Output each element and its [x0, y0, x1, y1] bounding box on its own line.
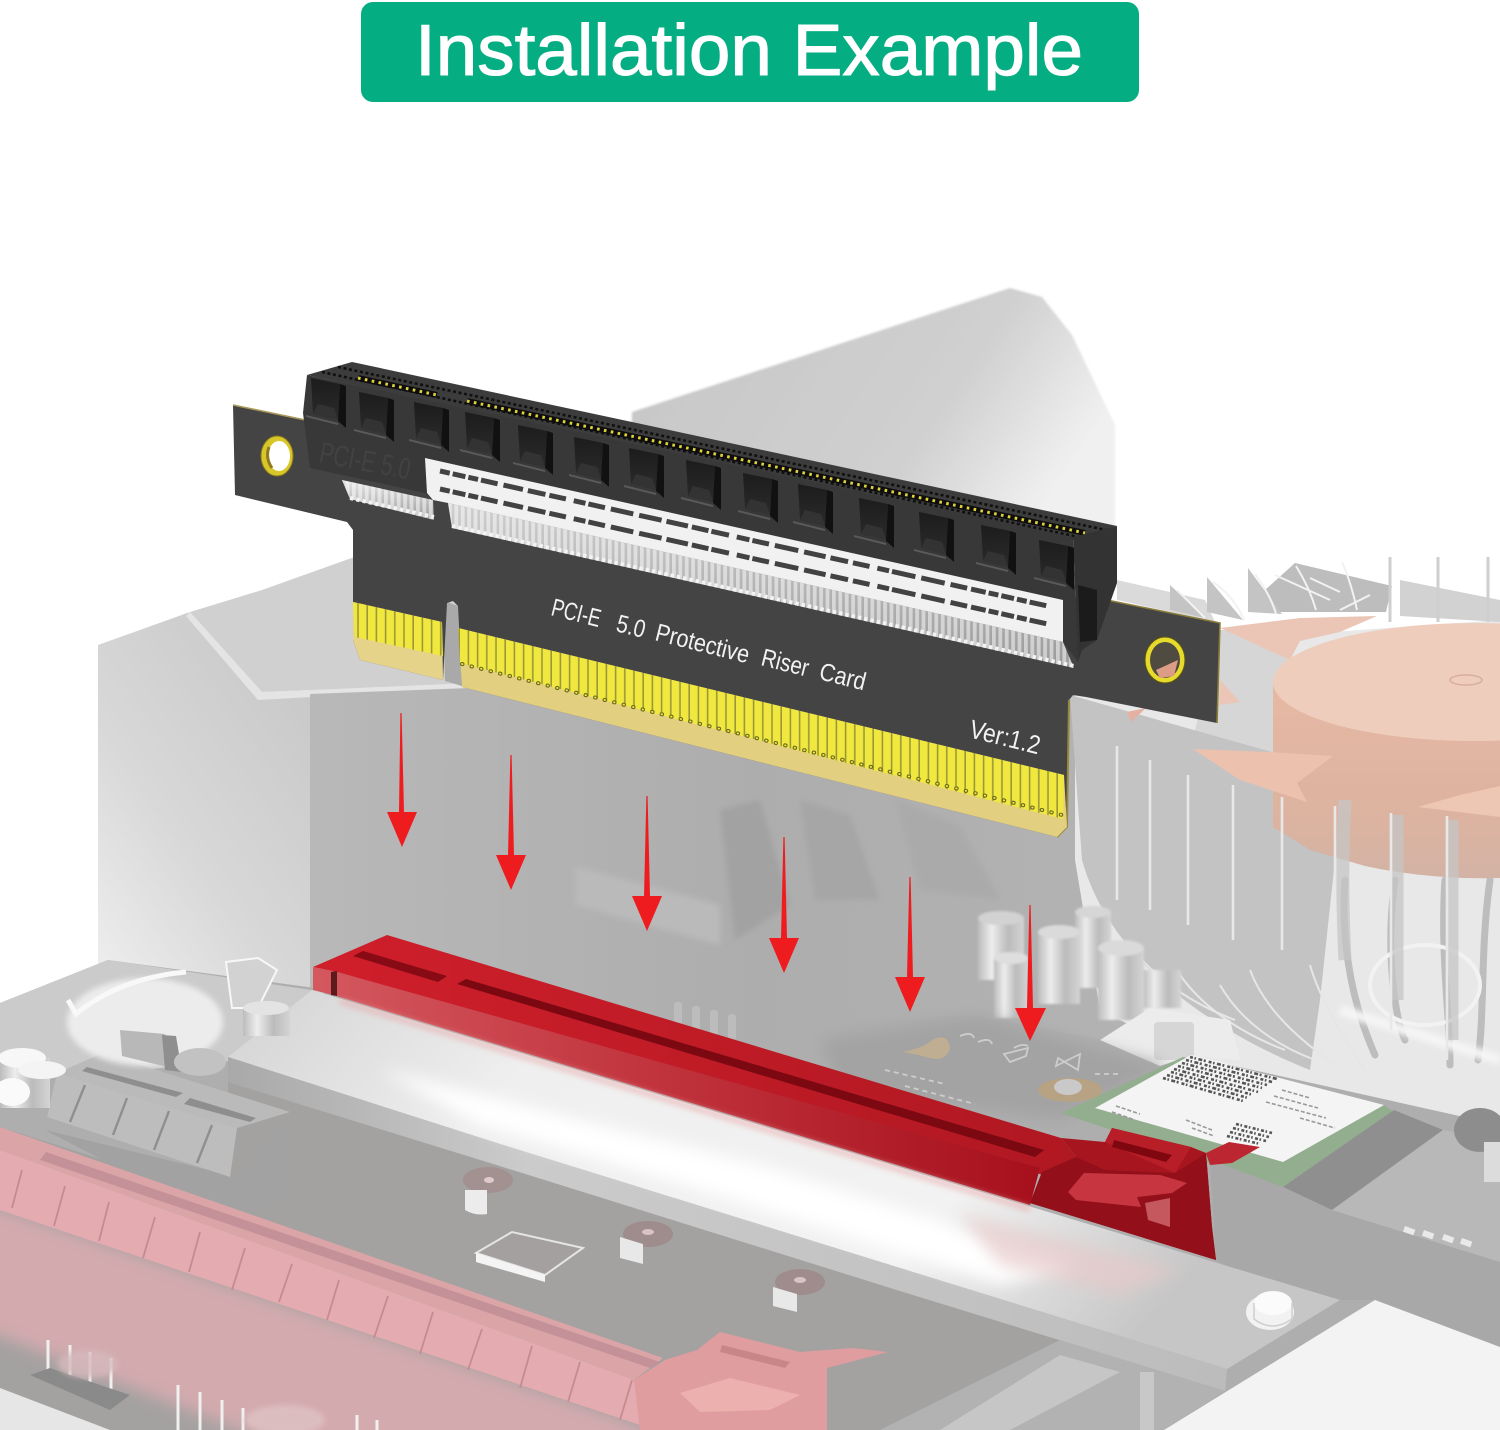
wall shading blocks: [575, 800, 1000, 945]
m.2 edge connector: [1283, 1110, 1443, 1210]
bright block behind wifi: [1100, 1008, 1240, 1066]
right side fins: [1344, 880, 1490, 1065]
fin posts: [1390, 557, 1488, 622]
lower board details: [463, 1167, 1500, 1430]
latch upper box: [1105, 1128, 1191, 1173]
pin header behind slot: [674, 1002, 736, 1040]
top fins: [1117, 563, 1500, 622]
lower board: [0, 1082, 1225, 1430]
dark knob and white chip: [1454, 1108, 1500, 1182]
fan hub top: [1273, 623, 1500, 741]
heatsink light backing: [1075, 620, 1500, 1135]
red insertion arrows: [387, 713, 1046, 1041]
screw post left: [463, 1167, 513, 1214]
module label: [1095, 1055, 1384, 1162]
curved fin arcs: [1130, 945, 1365, 1070]
label fine print: [1112, 1090, 1335, 1136]
fan small blade fragment: [1219, 680, 1240, 705]
chassis and wall backdrop: [98, 288, 1200, 1060]
left mounting hole: [261, 436, 293, 476]
lower slot latch: [634, 1332, 888, 1430]
crystal chip: [476, 1232, 583, 1282]
fan hub side: [1273, 680, 1500, 878]
title banner: [361, 2, 1139, 102]
cooling fan: [1117, 616, 1500, 1060]
motherboard surface: [0, 960, 1500, 1430]
white block bottom right: [1164, 1300, 1500, 1430]
tab edge highlights: [233, 405, 1220, 837]
lower slot tooth dividers: [12, 1170, 632, 1420]
card marking: [549, 594, 869, 696]
fan blade right: [1418, 786, 1500, 817]
curved fin body: [1070, 695, 1335, 1070]
version marking: Ver:1.2: [967, 714, 1044, 760]
cooler heatsink: [1070, 557, 1500, 1135]
gold finger tan base right: [458, 628, 1067, 837]
card marking: Riser: [759, 644, 812, 682]
bottom left pin headers: [0, 1340, 377, 1430]
latch arrow tip: [1206, 1142, 1260, 1165]
lighter post and floor: [880, 1340, 1225, 1430]
pink fragment under tab: [1127, 708, 1146, 722]
left chassis face: [98, 612, 316, 1010]
gold finger tan base left: [353, 602, 443, 680]
fan blade top: [1220, 616, 1377, 660]
fin lines over fan: [1117, 746, 1452, 1060]
arrow 1: [387, 713, 417, 847]
arrow 3: [632, 796, 662, 931]
slot top surface: [313, 935, 1076, 1175]
card marking: PCI-E: [549, 594, 604, 633]
card notch back: [443, 602, 462, 686]
white board strip: [0, 990, 1340, 1430]
banner title: Installation Example: [415, 11, 1083, 91]
strip screw post: [1246, 1291, 1294, 1330]
connector teeth: [306, 378, 1074, 590]
white shield plate: [425, 458, 1063, 642]
screw post mid: [620, 1221, 673, 1264]
silkscreen marks: [885, 1034, 1121, 1104]
capacitors: [978, 906, 1181, 1020]
shield slots: [440, 471, 1052, 625]
small grey expansion socket: [45, 1053, 295, 1230]
bottom left light strip: [0, 1388, 110, 1430]
lower slot face: [0, 1150, 640, 1425]
card marking: 5.0: [614, 610, 648, 644]
strip soft glow: [380, 1070, 1080, 1285]
slot front face: [313, 967, 1040, 1205]
central back wall: [310, 688, 1200, 1060]
connector contact rows: [322, 367, 1106, 537]
finger vias: [462, 664, 1062, 815]
wifi board silkscreen area: [820, 1016, 1167, 1120]
slot left clip: [331, 971, 337, 996]
connector top surface: [307, 362, 1117, 540]
connector right end: [1073, 526, 1117, 662]
card marking: Card: [817, 658, 869, 696]
arrow 2: [496, 755, 526, 890]
lower right board: [1210, 1160, 1500, 1347]
card pcb: [233, 405, 1220, 837]
qr code small: [1227, 1124, 1272, 1144]
yellow fingers left: [353, 602, 443, 656]
yellow fingers right: [458, 628, 1064, 819]
fan blade lower: [1193, 749, 1333, 802]
screw post right: [773, 1269, 825, 1312]
arrow 5: [895, 877, 925, 1012]
smd marks: [1403, 1226, 1472, 1247]
lower slot top: [0, 1127, 663, 1380]
upper chassis plate: [190, 555, 470, 692]
banner background: [361, 2, 1139, 102]
latch lever: [1068, 1173, 1187, 1207]
connector front body: [303, 375, 1078, 662]
pin tips: [350, 498, 1074, 666]
pink lower pcie slot: [0, 1127, 888, 1430]
red slot latch: [1030, 1128, 1260, 1260]
red pcie slot: [313, 935, 1076, 1209]
red glow below slot: [340, 1001, 1030, 1209]
arrow 4: [769, 837, 799, 973]
m.2 wifi module: [1061, 1055, 1443, 1213]
slot channels: [353, 951, 447, 982]
riser card: [233, 362, 1220, 837]
pins left group: [342, 480, 434, 520]
battery and capacitors: [0, 958, 290, 1108]
right mounting hole: [1145, 637, 1185, 683]
fin highlights: [1177, 562, 1370, 620]
qr code large: [1163, 1057, 1277, 1101]
back chassis panel: [630, 288, 1115, 570]
card marking: Protective: [653, 619, 752, 669]
pins main group: [448, 503, 1074, 668]
strip shadow band: [228, 1057, 1227, 1391]
faint connector marking: PCI-E 5.0: [317, 436, 413, 486]
pink glow under slot: [0, 1195, 690, 1430]
arrow 6: [1015, 905, 1046, 1041]
silkscreen logo: [902, 1037, 1102, 1102]
